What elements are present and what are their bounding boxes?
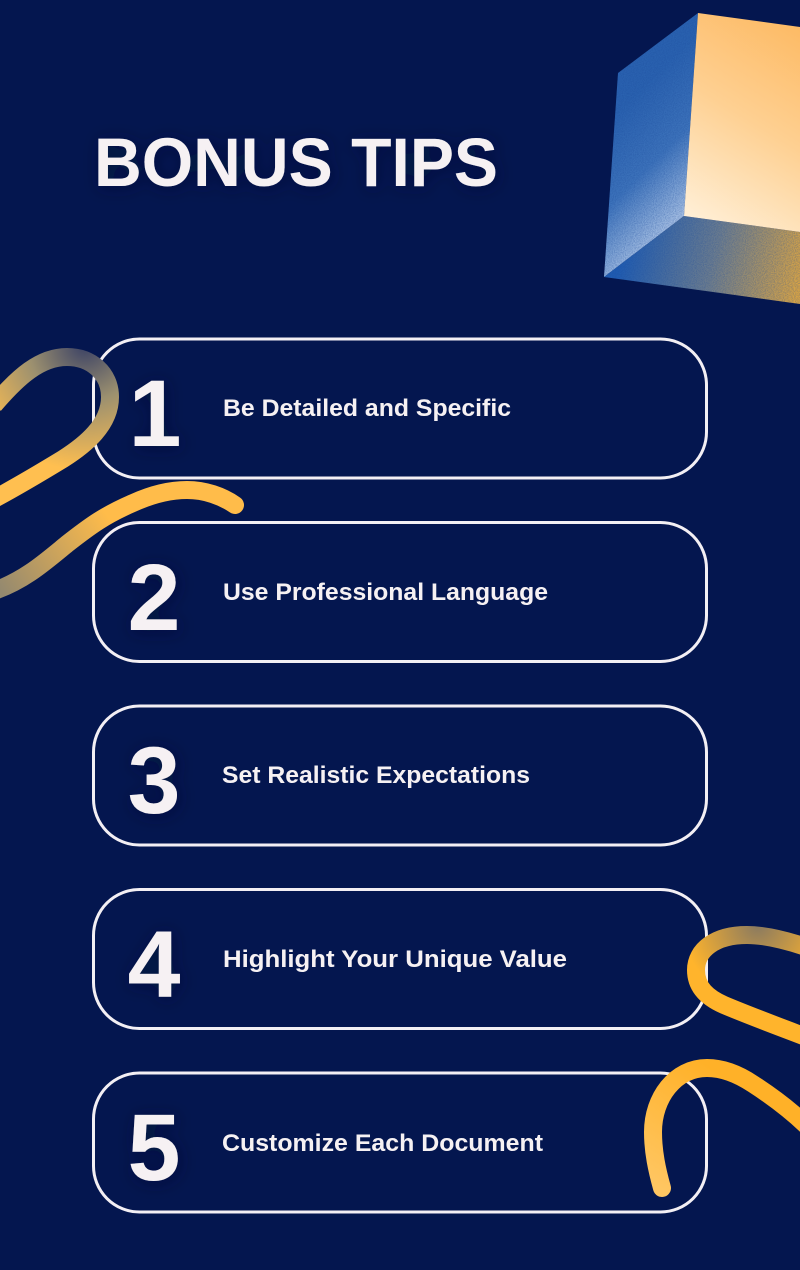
decorative curve: lower-right hook xyxy=(653,1068,800,1188)
number 1: 1 xyxy=(129,361,181,467)
tip card 2 xyxy=(94,522,706,662)
tip card 5 xyxy=(94,1073,706,1212)
tip card 4 xyxy=(94,890,706,1028)
tip text 4: Highlight Your Unique Value xyxy=(223,946,567,973)
decorative curve: right loop xyxy=(696,935,800,1037)
tip text 2: Use Professional Language xyxy=(223,579,548,606)
number 2: 2 xyxy=(128,545,180,651)
tip text 1: Be Detailed and Specific xyxy=(223,395,511,422)
tip text 3: Set Realistic Expectations xyxy=(222,762,530,789)
number 3: 3 xyxy=(128,728,180,834)
tip card 1 xyxy=(94,339,706,478)
number 5: 5 xyxy=(128,1095,180,1201)
decorative curve: left wave xyxy=(0,490,235,591)
icon: 3D cube xyxy=(604,13,800,304)
tip card 3 xyxy=(94,706,706,845)
tip text 5: Customize Each Document xyxy=(222,1130,543,1157)
title: BONUS TIPS xyxy=(94,124,498,201)
number 4: 4 xyxy=(128,912,181,1018)
decorative curve: top-left loop xyxy=(0,357,110,499)
